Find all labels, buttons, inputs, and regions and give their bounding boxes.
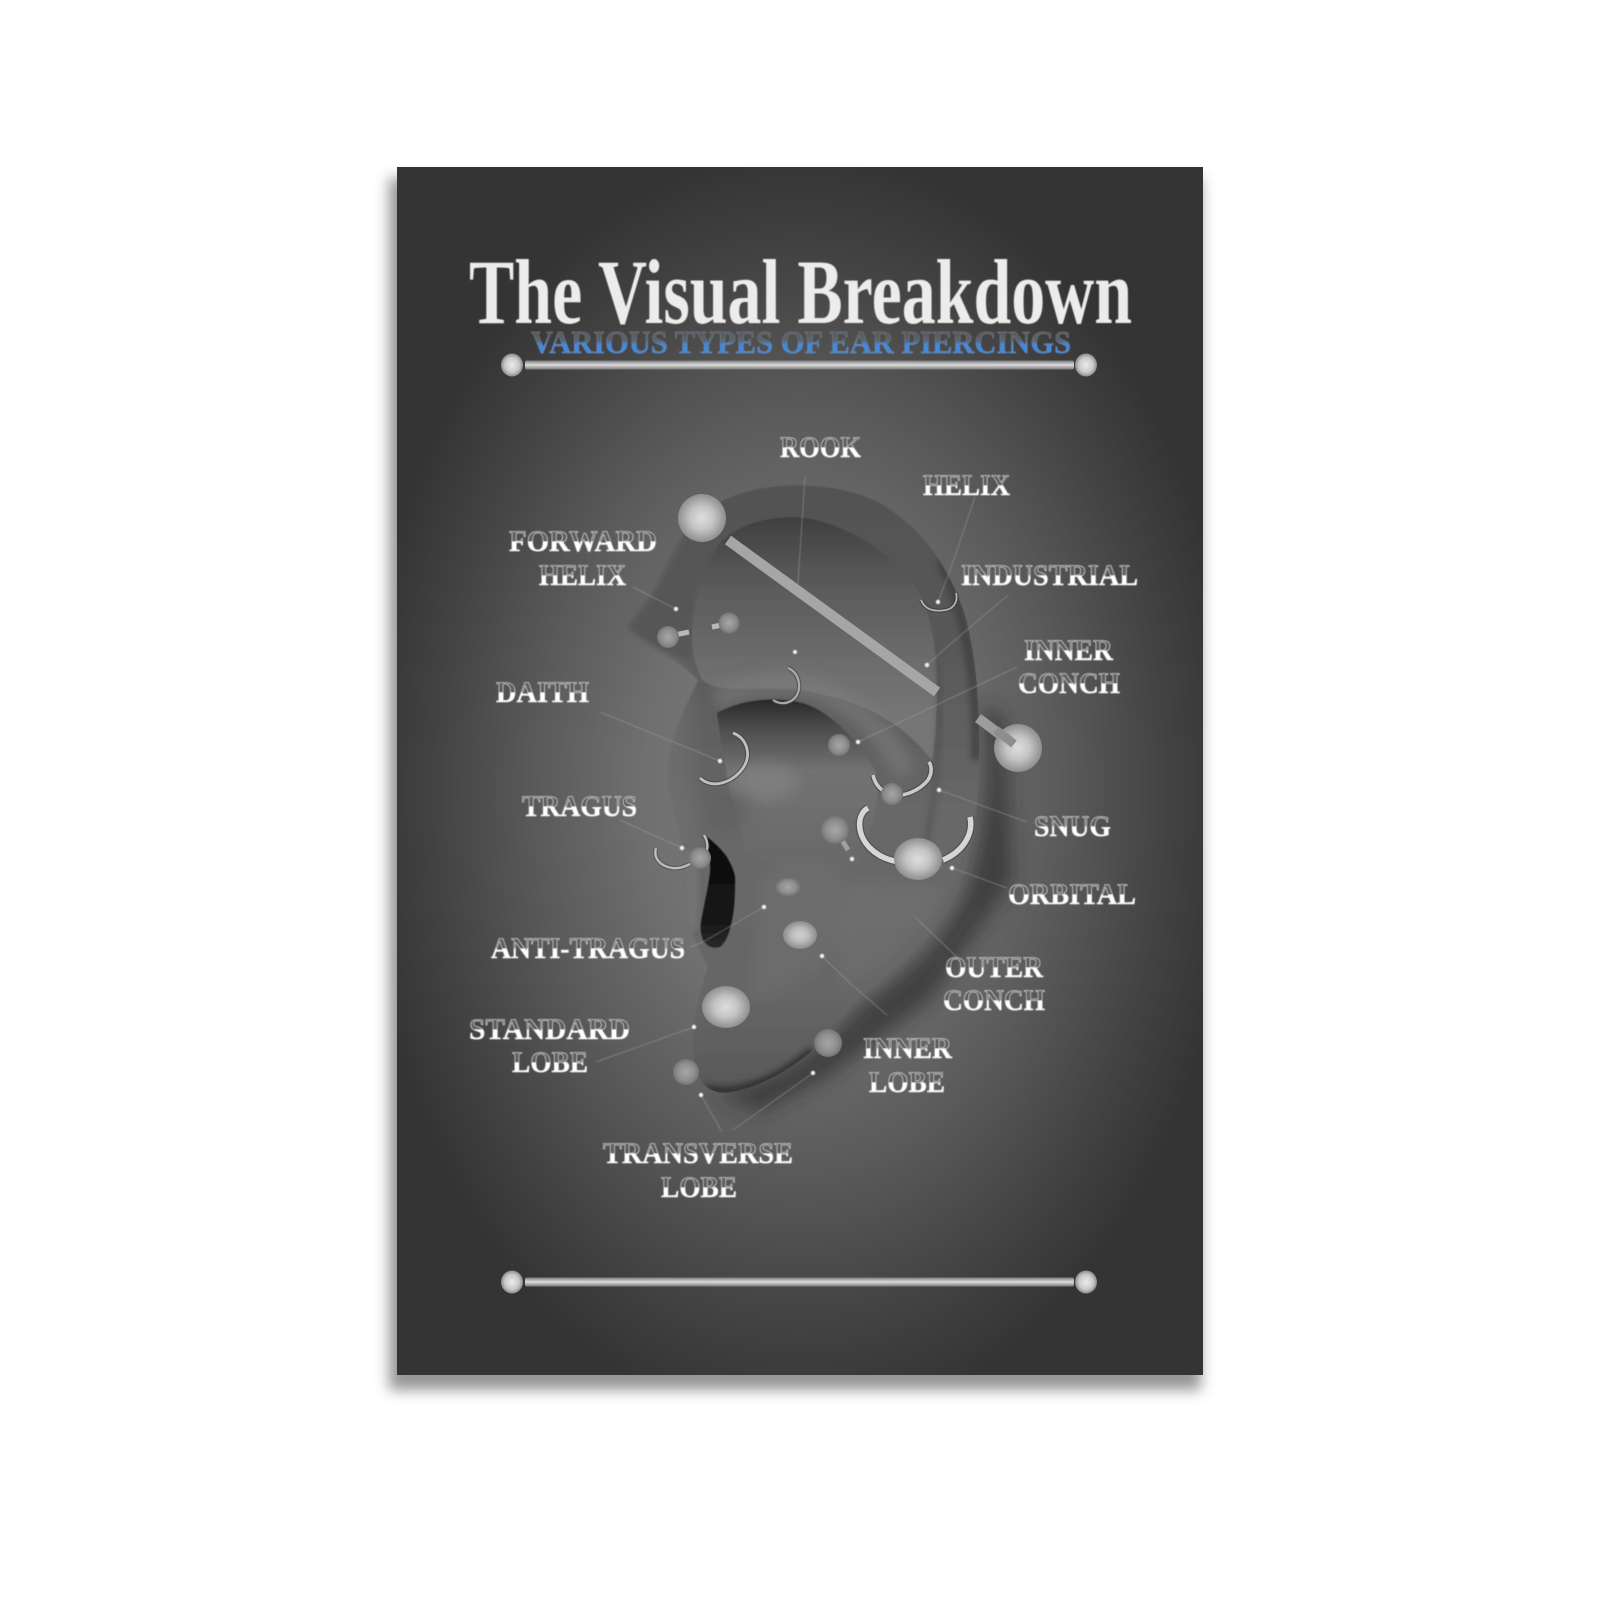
label: outer conch: OUTER (945, 951, 1043, 984)
label: outer conch: CONCH (943, 984, 1045, 1017)
label: snug: SNUG (1034, 810, 1111, 843)
label: orbital: ORBITAL (1008, 878, 1136, 911)
label: tragus: TRAGUS (522, 790, 637, 823)
piercing: helix ring (921, 593, 957, 611)
panel: poster background (397, 167, 1203, 1375)
label: orbital (850, 857, 1136, 911)
industrial top bead (678, 494, 726, 542)
piercing: rook ring (773, 668, 799, 703)
label: helix: HELIX (923, 469, 1010, 502)
ear canal (701, 837, 735, 948)
piercing: transverse lobe (673, 1059, 699, 1085)
label: inner conch (856, 634, 1120, 744)
label: transverse lobe (603, 1071, 815, 1204)
piercing: forward helix (657, 612, 740, 648)
label: helix (923, 469, 1010, 604)
ear illustration (627, 485, 1012, 1112)
piercing: tragus (655, 835, 711, 869)
subtitle: VARIOUS TYPES OF EAR PIERCINGS (531, 324, 1071, 360)
label: standard lobe: LOBE (512, 1046, 588, 1079)
label: daith (496, 676, 722, 763)
label: standard lobe: STANDARD (469, 1013, 630, 1046)
piercing: inner lobe (814, 1029, 842, 1057)
label: tragus (522, 790, 684, 850)
title: The Visual Breakdown (469, 241, 1132, 343)
label: inner conch: INNER (1024, 634, 1113, 667)
label: outer conch (915, 917, 1045, 1017)
scapha hollow (692, 517, 937, 760)
antihelix fold highlight (715, 684, 905, 775)
top barbell divider (501, 354, 1097, 376)
label: inner conch: CONCH (1018, 667, 1120, 700)
antitragus ridge (750, 865, 870, 1000)
piercing: industrial barbell (678, 494, 1042, 772)
ear drop shadow (710, 700, 1012, 1112)
ear inner shading (684, 517, 976, 1091)
piercing: inner conch bead (828, 734, 850, 756)
label: inner lobe: LOBE (869, 1066, 945, 1099)
piercing: snug (873, 762, 931, 805)
piercing: daith ring (700, 733, 748, 784)
label: inner lobe: INNER (863, 1032, 952, 1065)
label: snug (937, 788, 1111, 843)
industrial bar front (728, 540, 937, 692)
dark patch above canal (732, 796, 743, 822)
label: rook: ROOK (780, 431, 862, 464)
label: inner lobe (820, 954, 952, 1099)
piercing: orbital (860, 808, 971, 880)
piercing: anti-tragus bead (776, 878, 800, 896)
label: forward helix: FORWARD (509, 525, 657, 558)
label: anti-tragus: ANTI-TRAGUS (491, 932, 685, 965)
piercing: standard lobe (702, 986, 750, 1028)
lobe bottom edge (705, 1050, 812, 1091)
label: industrial: INDUSTRIAL (961, 559, 1138, 592)
label: anti-tragus (491, 905, 766, 965)
piercing: inner conch lower bead (783, 921, 817, 949)
label: transverse lobe: LOBE (661, 1171, 737, 1204)
tragus strip highlight (687, 858, 695, 927)
label: rook (780, 431, 862, 654)
label: transverse lobe: TRANSVERSE (603, 1137, 793, 1170)
label: industrial (925, 559, 1138, 667)
lower conch light (837, 880, 945, 990)
concha hollow (716, 699, 878, 802)
poster drop shadow (389, 178, 1201, 1390)
helix root (627, 515, 725, 662)
bottom barbell divider (501, 1270, 1097, 1294)
label: standard lobe (469, 1013, 696, 1079)
concha highlight (737, 764, 794, 798)
outer rim shading (940, 560, 976, 760)
label: daith: DAITH (496, 676, 589, 709)
label: forward helix: HELIX (539, 559, 626, 592)
label: forward helix (509, 525, 678, 611)
industrial bottom bead (994, 724, 1042, 772)
industrial bar back (978, 718, 1010, 742)
ear silhouette (675, 486, 970, 1083)
piercing: conch bead (821, 816, 849, 850)
rim inner edge (924, 663, 939, 840)
